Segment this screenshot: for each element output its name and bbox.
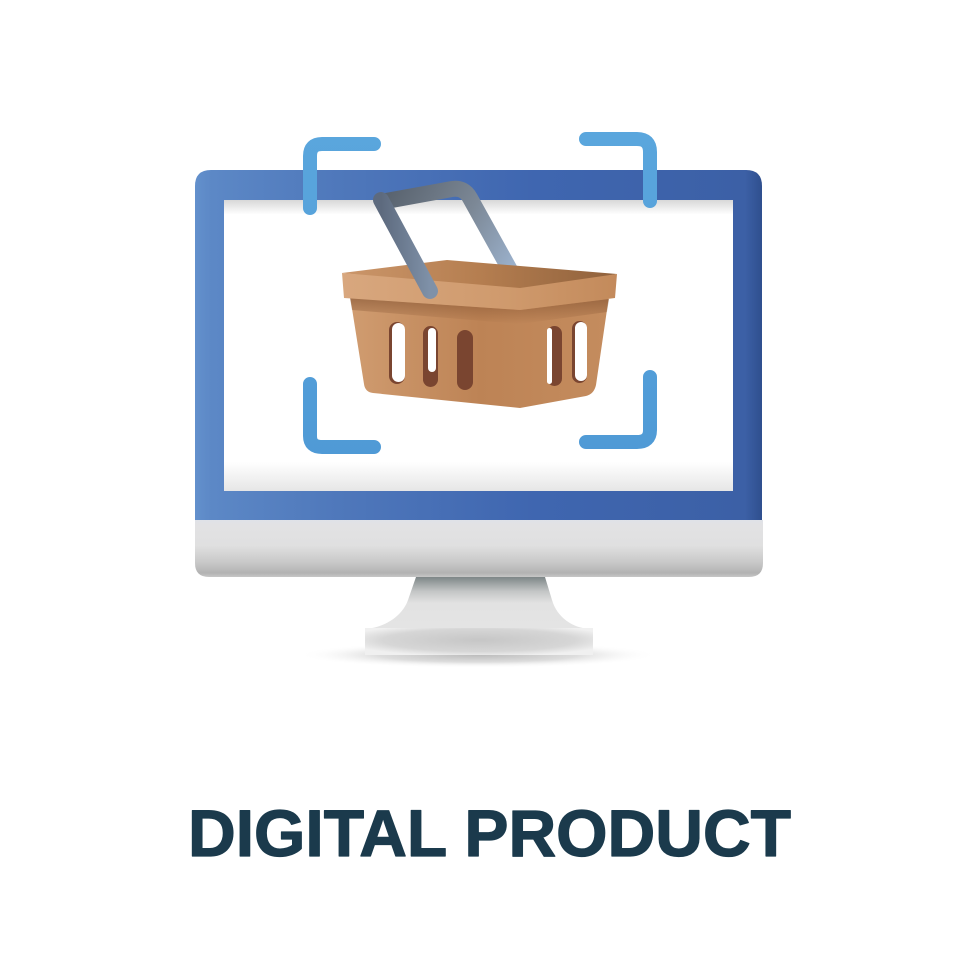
slot 3 xyxy=(457,330,473,390)
handle front arm xyxy=(381,200,430,291)
bracket top right xyxy=(586,139,650,201)
slot 5 xyxy=(572,321,587,383)
slot 2 xyxy=(423,326,438,387)
scan brackets xyxy=(310,139,650,447)
basket inner xyxy=(342,260,617,292)
basket body xyxy=(350,296,609,408)
screen xyxy=(224,200,733,491)
bracket bottom right xyxy=(586,377,650,442)
rim shadow xyxy=(350,298,609,324)
basket xyxy=(342,189,617,408)
monitor xyxy=(195,170,763,668)
monitor foot xyxy=(365,628,593,655)
monitor chin xyxy=(195,520,763,577)
handle back arm and top bar xyxy=(386,189,510,270)
slot 1 xyxy=(389,322,405,384)
basket rim xyxy=(342,273,617,310)
title: DIGITAL PRODUCT xyxy=(188,796,791,870)
bracket bottom left xyxy=(310,384,374,447)
monitor shadow xyxy=(298,642,658,668)
monitor stand xyxy=(365,577,590,629)
monitor bezel xyxy=(195,170,762,520)
slot 4 xyxy=(547,326,562,386)
bracket top left xyxy=(310,144,374,208)
basket slots xyxy=(389,321,587,390)
